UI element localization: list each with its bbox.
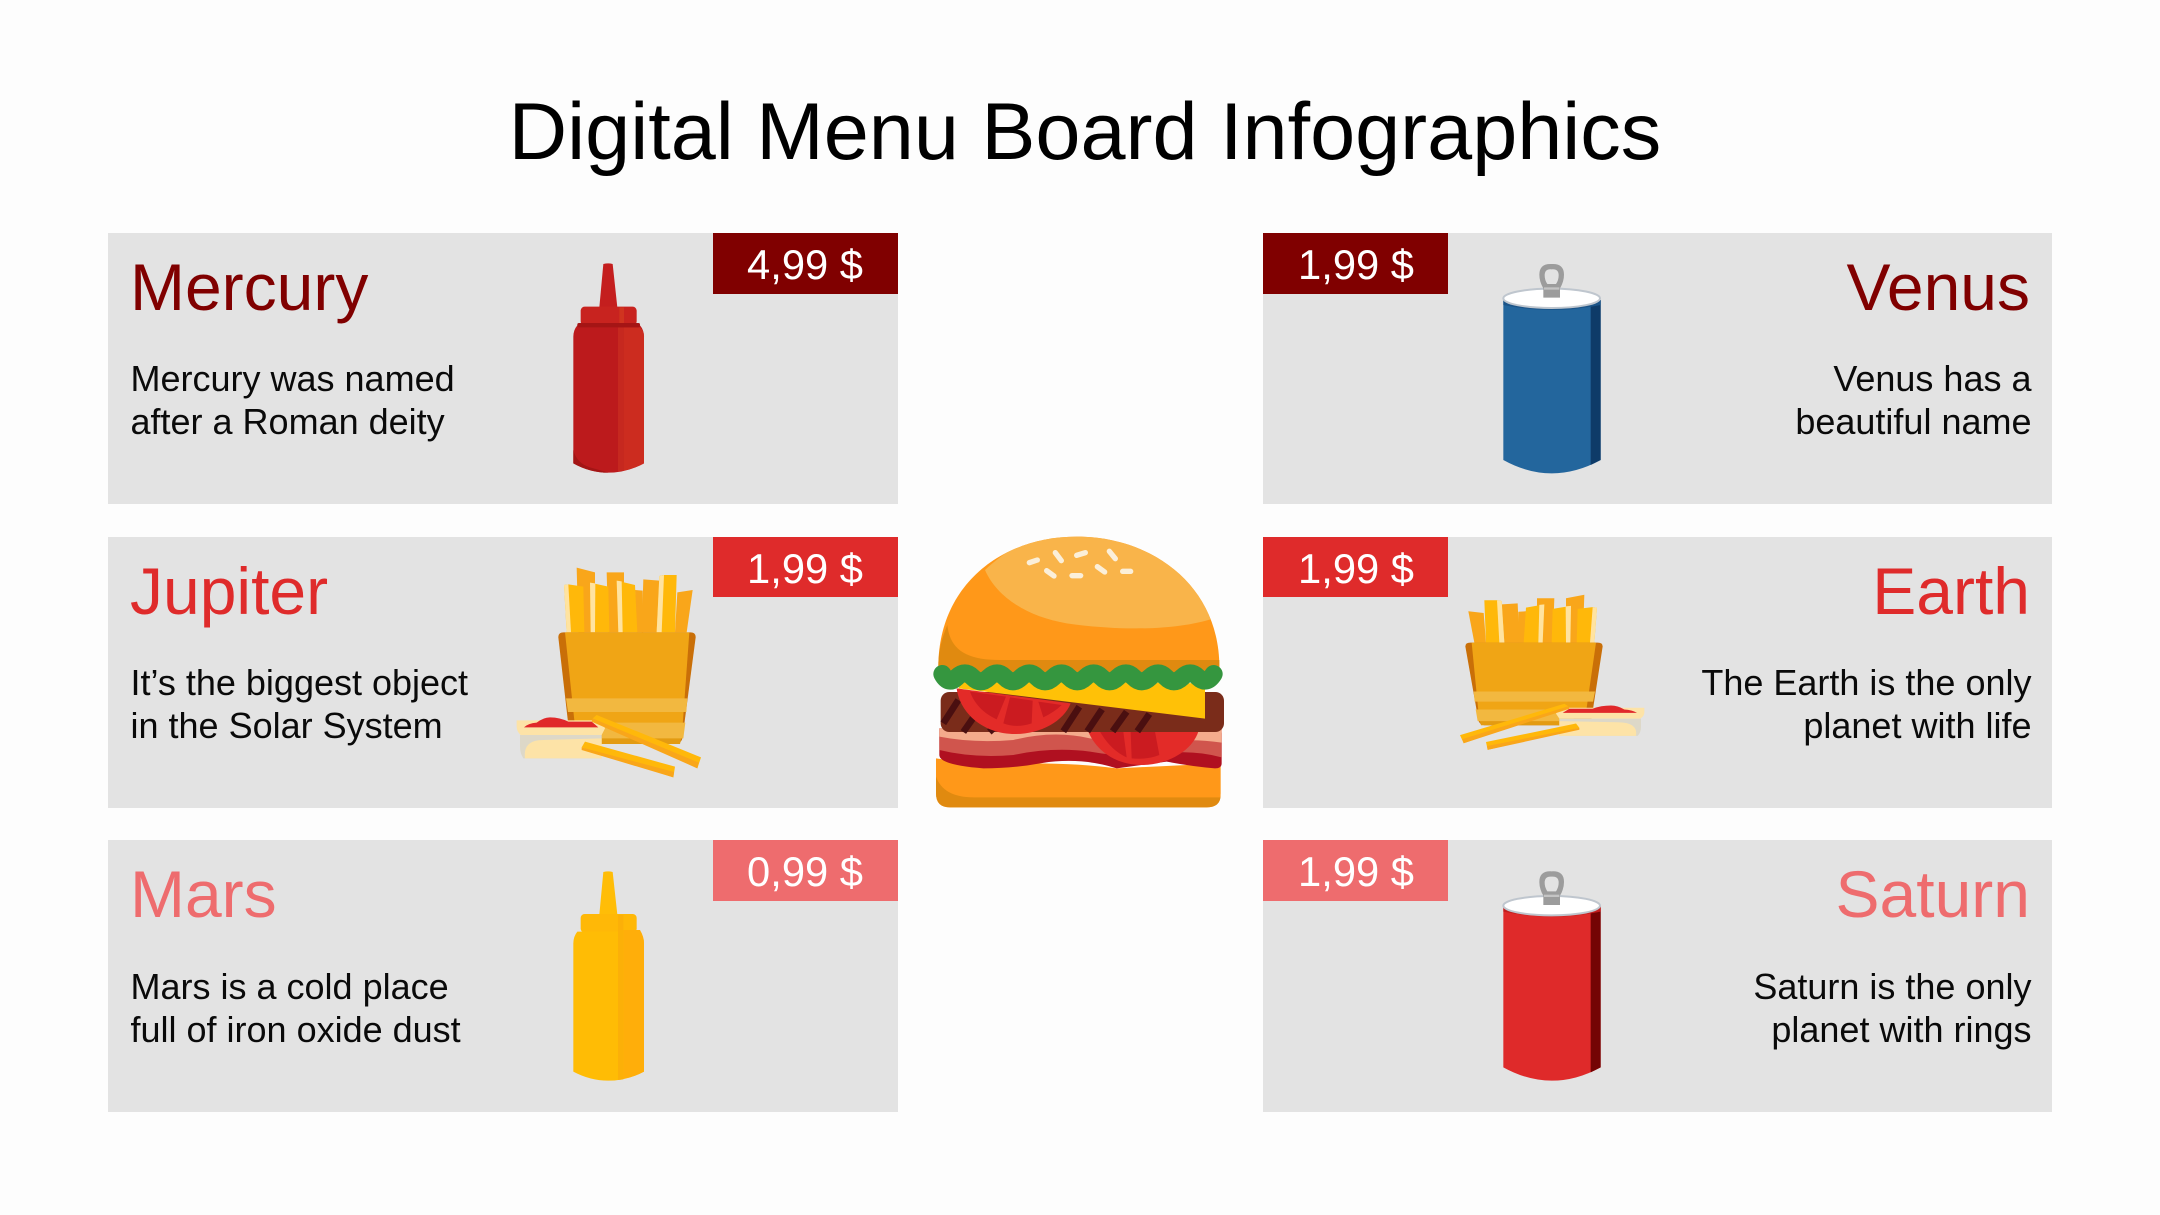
top bun — [938, 530, 1219, 673]
price tag: Earth: 1,99 $ — [1298, 545, 1414, 592]
bacon — [939, 728, 1222, 768]
heading: Mercury: Mercury — [130, 250, 368, 324]
text: Mercury description: after a Roman deity — [130, 401, 445, 442]
text: Mars description: Mars is a cold place — [130, 966, 449, 1007]
text: Venus description: beautiful name — [1795, 401, 2032, 442]
price tag: Jupiter — [713, 537, 898, 597]
icon: blue can — [1503, 264, 1601, 473]
panel: Jupiter — [108, 537, 898, 808]
heading: Saturn: Saturn — [1836, 857, 2030, 931]
price tag: Jupiter: 1,99 $ — [747, 545, 863, 592]
price tag: Earth — [1263, 537, 1448, 597]
text: Venus description: Venus has a — [1833, 358, 2032, 399]
text: Earth description: planet with life — [1803, 705, 2032, 746]
icon: fries with dip — [517, 568, 701, 777]
heading: Jupiter: Jupiter — [130, 554, 328, 628]
icon: burger — [936, 530, 1224, 807]
text: Saturn description: planet with rings — [1771, 1009, 2032, 1050]
price tag: Saturn: 1,99 $ — [1298, 848, 1414, 895]
text: Saturn description: Saturn is the only — [1753, 966, 2032, 1007]
price tag: Venus: 1,99 $ — [1298, 241, 1414, 288]
title: Digital Menu Board Infographics — [509, 87, 1661, 177]
bottom bun — [936, 758, 1221, 807]
sesame seeds — [1029, 551, 1131, 576]
panel: Saturn — [1263, 840, 2052, 1112]
text: Mars description: full of iron oxide dust — [130, 1009, 461, 1050]
price tag: Mercury — [713, 233, 898, 294]
icon: ketchup bottle — [573, 263, 644, 473]
icon: red can — [1503, 871, 1601, 1081]
lettuce — [942, 673, 1214, 681]
cheese — [958, 680, 1205, 719]
price tag: Venus — [1263, 233, 1448, 294]
text: Jupiter description: It’s the biggest object — [130, 662, 468, 703]
heading: Earth: Earth — [1872, 554, 2030, 628]
panel: Venus — [1263, 233, 2052, 504]
patty — [941, 692, 1224, 732]
tomato slice lower — [1088, 732, 1198, 765]
text: Earth description: The Earth is the only — [1701, 662, 2032, 703]
icon: mustard bottle — [573, 871, 644, 1081]
price tag: Saturn — [1263, 840, 1448, 901]
price tag: Mars — [713, 840, 898, 901]
text: Mercury description: Mercury was named — [130, 358, 455, 399]
panel: Earth — [1263, 537, 2052, 808]
panel: Mercury — [108, 233, 898, 504]
heading: Mars: Mars — [130, 857, 277, 931]
icon: fries with dip, mirrored — [1460, 595, 1644, 750]
panel: Mars — [108, 840, 898, 1112]
heading: Venus: Venus — [1846, 250, 2030, 324]
tomato slice upper — [957, 688, 1071, 734]
text: Jupiter description: in the Solar System — [130, 705, 443, 746]
price tag: Mercury: 4,99 $ — [747, 241, 863, 288]
price tag: Mars: 0,99 $ — [747, 848, 863, 895]
